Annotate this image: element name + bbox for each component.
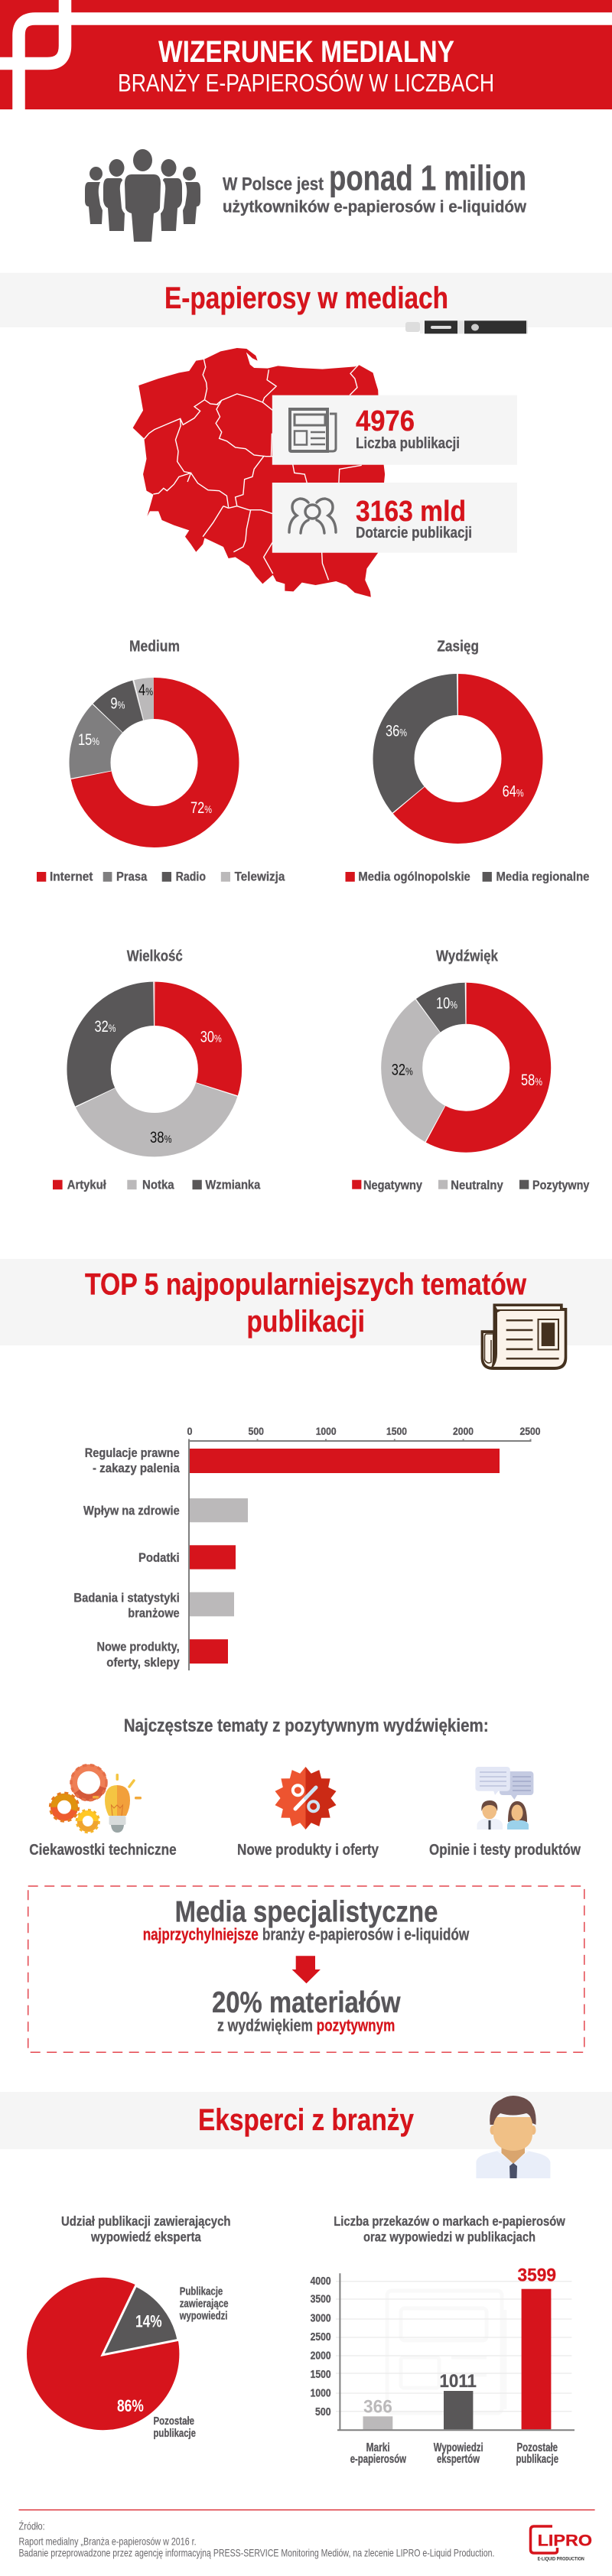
y axis labels: 4000 [311, 2275, 331, 2288]
legend: Internet [50, 870, 93, 884]
bar labels: - zakazy palenia [93, 1462, 180, 1475]
chart: Wydźwięk: 58% [521, 1072, 542, 1089]
y axis labels: 2000 [311, 2350, 331, 2362]
legend: Artykuł [67, 1178, 106, 1192]
label: nowe produkty i oferty: Nowe produkty i oferty [237, 1841, 379, 1859]
chart: Medium: 9% [110, 695, 125, 713]
chart: Medium: 4% [138, 681, 153, 699]
panel: dotarcie publikacji: Dotarcie publikacji [356, 524, 472, 542]
title [118, 35, 494, 96]
bar values [363, 2265, 556, 2417]
label: opinie i testy produktów: Opinie i testy produktów [429, 1841, 581, 1859]
chart: Medium [37, 638, 285, 884]
bar labels: Nowe produkty, [96, 1640, 180, 1654]
text: users in Poland: użytkowników e-papierosów i e-liquidów [223, 197, 527, 216]
bar labels: Wpływ na zdrowie [83, 1504, 180, 1518]
bar labels: ekspertów [437, 2453, 480, 2466]
icon: people with speech bubbles [475, 1767, 533, 1830]
source note: Źródło: [18, 2519, 45, 2532]
callout: specialist media: pozytywnym [317, 2016, 395, 2035]
panel: liczba publikacji [272, 395, 517, 465]
y axis labels: 500 [315, 2406, 331, 2418]
bar labels: publikacje [516, 2453, 558, 2466]
chart title: expert share: Udział publikacji zawierających [61, 2213, 231, 2229]
chart: Wielkość [53, 948, 261, 1192]
callout: specialist media [28, 1886, 584, 2052]
text: users in Poland: W Polsce jest [223, 174, 324, 195]
y axis labels: 1000 [311, 2388, 331, 2400]
legend: Media regionalne [496, 870, 589, 884]
bar labels [73, 1446, 180, 1670]
source note [18, 2519, 494, 2559]
legend: Wzmianka [205, 1178, 261, 1192]
chart: Wielkość: 38% [150, 1129, 171, 1147]
pie chart: expert share: 86% [117, 2396, 144, 2415]
title: WIZERUNEK MEDIALNY [158, 35, 454, 69]
header banner [0, 0, 612, 109]
icon: expert man [476, 2096, 550, 2178]
callout: specialist media: branży e-papierosów i e-liquidów [262, 1925, 470, 1944]
text: users in Poland [223, 158, 527, 216]
section band: eksperci [0, 2092, 612, 2149]
logo: LIPRO: LIPRO [538, 2532, 592, 2549]
donut [90, 698, 219, 827]
bar labels: Marki [366, 2441, 390, 2454]
donut [393, 694, 522, 823]
bar labels: oferty, sklepy [106, 1656, 180, 1670]
heading: E-papierosy w mediach [164, 281, 448, 315]
bar labels: Badania i statystyki [73, 1591, 180, 1605]
bar labels: Pozostałe [517, 2441, 558, 2454]
chart: Medium: Medium [129, 638, 180, 655]
label: ciekawostki techniczne: Ciekawostki techniczne [29, 1841, 177, 1859]
section band: e-papierosy w mediach [0, 273, 612, 327]
icon: newspaper with clip [481, 1303, 567, 1370]
chart: Wielkość: 30% [200, 1029, 222, 1046]
y axis labels [311, 2275, 331, 2418]
icon: people outline [289, 499, 336, 533]
y axis labels: 3500 [311, 2293, 331, 2305]
icon: discount badge [275, 1767, 337, 1830]
axis labels: 2500 [520, 1426, 540, 1437]
icon: group of people [85, 149, 200, 242]
chart: Medium: 72% [190, 799, 212, 817]
heading: TOP 5 najpopularniejszych tematów [85, 1267, 527, 1301]
section band: top 5 [0, 1259, 612, 1345]
legend [53, 1178, 261, 1192]
bar labels: Wypowiedzi [434, 2441, 483, 2454]
axis labels: 1500 [386, 1426, 407, 1437]
chart: Wielkość: Wielkość [127, 948, 183, 965]
axis labels: 2000 [453, 1426, 474, 1437]
bar labels: branżowe [128, 1606, 180, 1620]
bar chart: brand mentions [311, 2265, 575, 2466]
legend: Media ogólnopolskie [358, 870, 470, 884]
callout: specialist media: najprzychylniejsze [143, 1925, 259, 1944]
heading: positive topics: Najczęstsze tematy z pozytywnym wydźwiękiem: [124, 1716, 489, 1736]
logo: LIPRO: E-LIQUID PRODUCTION [538, 2556, 584, 2561]
legend: Prasa [116, 870, 148, 884]
pie labels: Pozostałe [153, 2415, 194, 2428]
bar values: 366 [363, 2396, 392, 2417]
bar labels: Regulacje prawne [85, 1446, 180, 1460]
icon: gears and light bulb [50, 1765, 142, 1833]
pie chart: expert share [27, 2278, 228, 2440]
pie chart: expert share: 14% [135, 2311, 162, 2330]
panel: dotarcie publikacji: 3163 mld [356, 496, 466, 528]
chart: Zasięg: 64% [503, 783, 524, 801]
source note: Raport medialny „Branża e-papierosów w 2016 r. [18, 2535, 197, 2548]
text: users in Poland: ponad 1 milion [329, 158, 526, 198]
legend [346, 870, 589, 884]
bar values: 3599 [517, 2265, 556, 2285]
donut [89, 1003, 220, 1135]
legend: Neutralny [451, 1179, 503, 1192]
chart: Wydźwięk: Wydźwięk [436, 948, 498, 965]
legend: Telewizja [235, 870, 285, 884]
arrow [292, 1956, 321, 1983]
legend: Notka [142, 1178, 174, 1192]
chart: Zasięg [346, 638, 589, 884]
chart title: brand mentions: oraz wypowiedzi w publikacjach [363, 2230, 536, 2245]
logo: LIPRO [531, 2526, 592, 2561]
callout: specialist media: Media specjalistyczne [175, 1896, 438, 1929]
pie labels: zawierające [180, 2298, 228, 2311]
chart: Wydźwięk: 32% [392, 1061, 413, 1078]
bar labels: e-papierosów [350, 2453, 406, 2466]
y axis labels: 1500 [311, 2369, 331, 2381]
chart: Medium: 15% [78, 731, 99, 749]
bars [190, 1449, 500, 1664]
bar chart: top 5 topics [73, 1426, 540, 1670]
heading: publikacji [246, 1305, 365, 1338]
bar labels: Podatki [138, 1551, 180, 1565]
pie labels: Publikacje [180, 2286, 223, 2298]
panel: liczba publikacji: Liczba publikacji [356, 434, 460, 452]
icon: newspaper [290, 409, 336, 451]
pie labels: wypowiedzi [179, 2311, 227, 2323]
axis labels: 500 [248, 1426, 264, 1437]
pie labels: publikacje [153, 2428, 196, 2440]
heading [85, 1267, 527, 1338]
legend: Pozytywny [532, 1179, 590, 1192]
bar labels [350, 2441, 558, 2466]
axis labels [187, 1426, 540, 1437]
y axis labels: 2500 [311, 2331, 331, 2343]
axis labels: 1000 [316, 1426, 337, 1437]
chart: Zasięg: Zasięg [437, 638, 479, 655]
map of Poland [133, 348, 385, 597]
chart: Wydźwięk: 10% [436, 994, 457, 1012]
donut [402, 1003, 530, 1132]
chart: Zasięg: 36% [386, 723, 407, 740]
bar values: 1011 [439, 2371, 477, 2392]
legend: Negatywny [363, 1179, 423, 1192]
legend [37, 870, 285, 884]
chart title: expert share [61, 2213, 231, 2245]
legend [352, 1179, 590, 1192]
heading: Eksperci z branży [198, 2103, 415, 2137]
chart: Wielkość: 32% [95, 1018, 116, 1036]
axis labels: 0 [187, 1426, 193, 1437]
y axis labels: 3000 [311, 2313, 331, 2325]
panel: dotarcie publikacji [272, 483, 517, 553]
chart title: brand mentions [334, 2213, 565, 2245]
icon: e-cigarette [405, 320, 528, 333]
callout: specialist media: z wydźwiękiem [217, 2016, 313, 2035]
callout: specialist media: 20% materiałów [212, 1986, 401, 2019]
pie labels [153, 2286, 228, 2440]
title: BRANŻY E-PAPIEROSÓW W LICZBACH [118, 69, 494, 96]
panel: liczba publikacji: 4976 [356, 405, 415, 437]
chart title: brand mentions: Liczba przekazów o markach e-papierosów [334, 2213, 565, 2229]
chart title: expert share: wypowiedź eksperta [90, 2230, 201, 2245]
chart: Wydźwięk [352, 948, 590, 1192]
bars [363, 2289, 551, 2429]
legend: Radio [176, 870, 206, 884]
